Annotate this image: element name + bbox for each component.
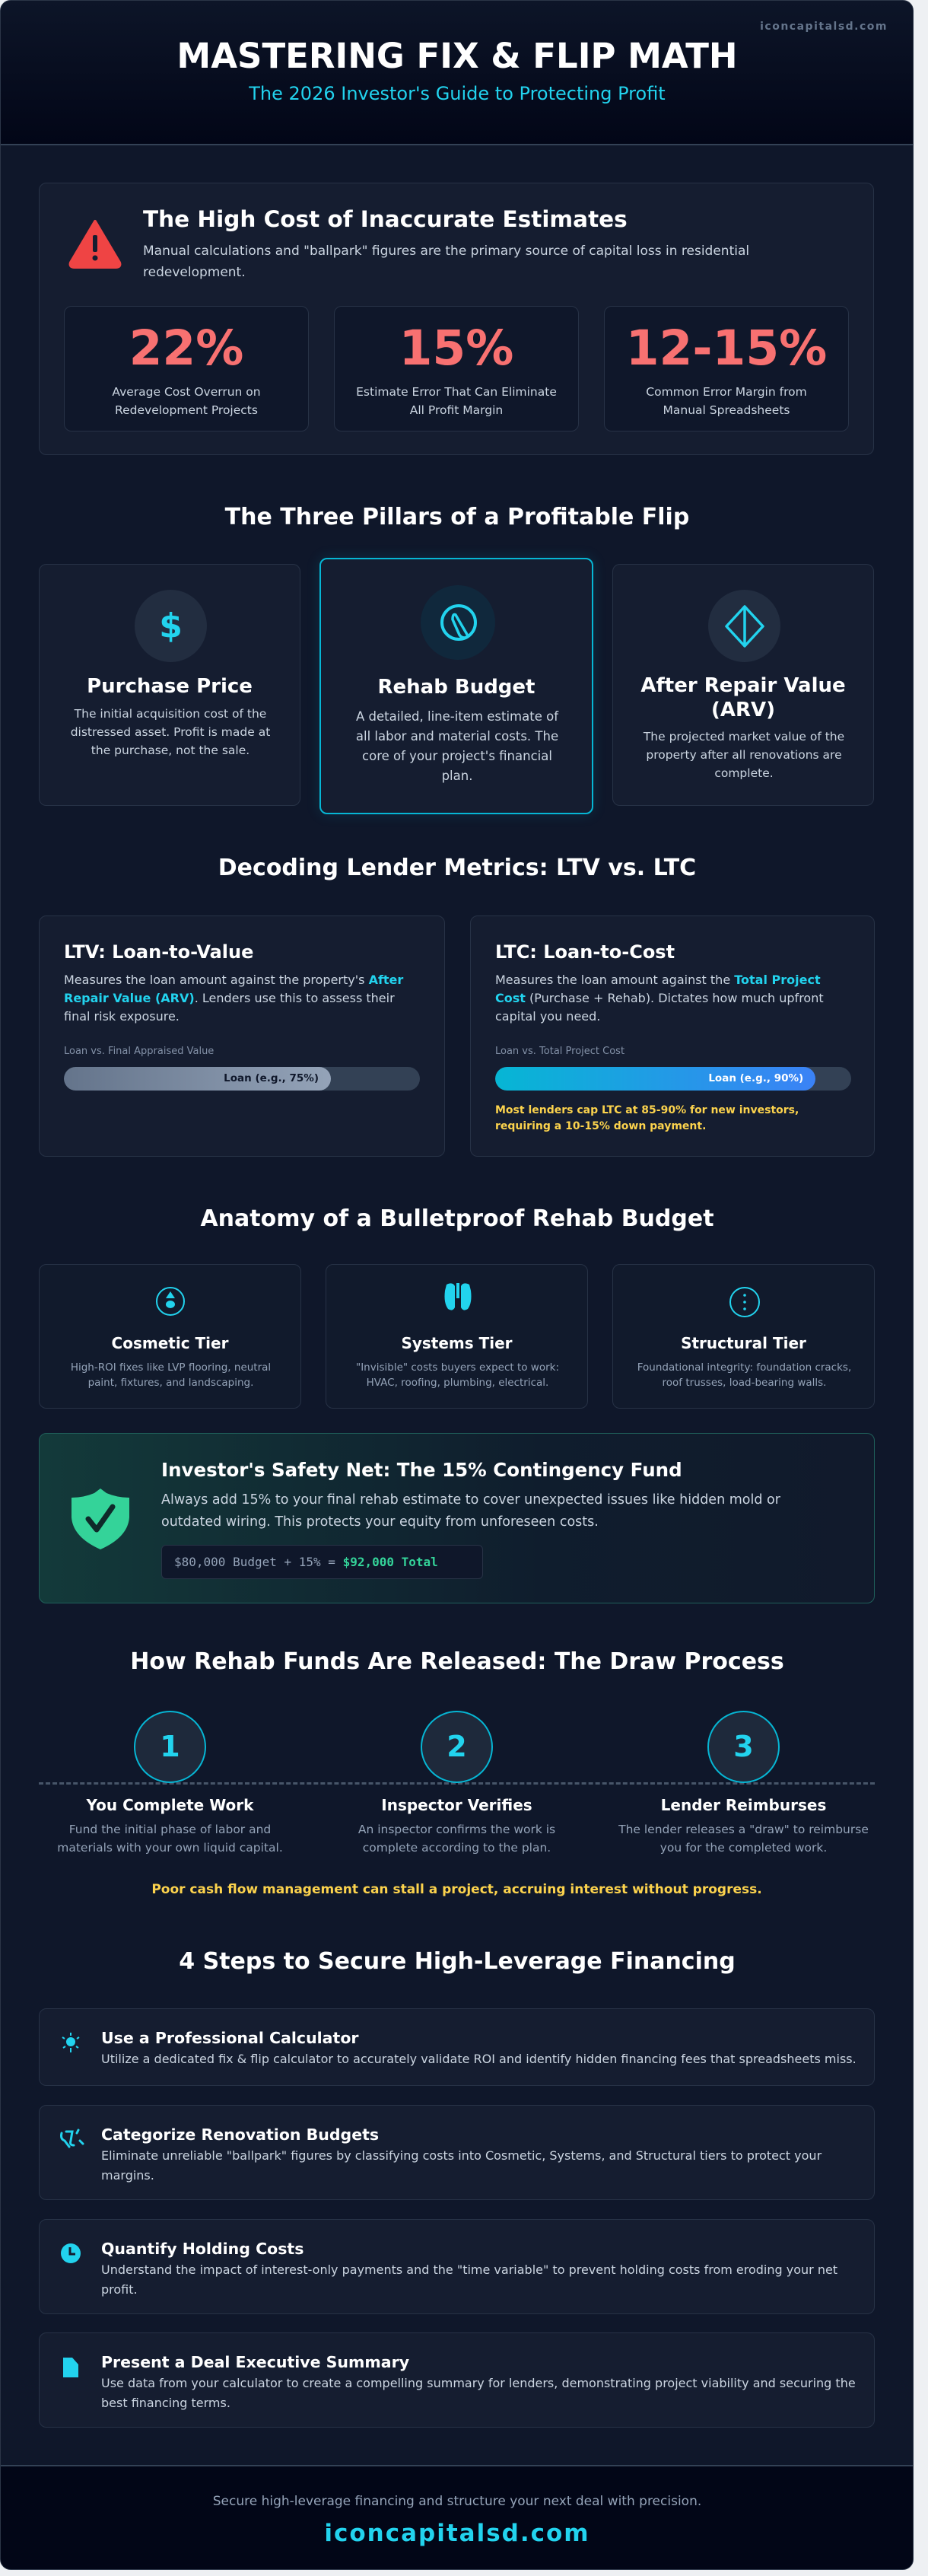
text: Measures the loan amount against the property's After Repair Value (ARV). Lenders use this to assess their final risk exposure. (64, 973, 403, 1024)
step card: calculator (39, 2008, 875, 2086)
panel: structural tier (612, 1264, 875, 1409)
dashed line (39, 1782, 875, 1785)
footer url: iconcapitalsd.com (324, 2520, 590, 2547)
icon: dollar (135, 590, 207, 662)
title: (ARV) (711, 699, 775, 721)
text: "Invisible" costs buyers expect to work: HVAC, roofing, plumbing, electrical. (356, 1361, 559, 1389)
formula box (161, 1545, 483, 1579)
icon: dotted circle (729, 1287, 760, 1317)
text: Measures the loan amount against the Total Project Cost (Purchase + Rehab). Dictates how much upfront capital you need. (495, 973, 824, 1024)
heading: Investor's Safety Net: The 15% Contingency Fund (161, 1459, 682, 1481)
step 2: An inspector confirms the work is complete according to the plan. (358, 1823, 555, 1855)
footer tagline: Secure high-leverage financing and structure your next deal with precision. (213, 2494, 701, 2509)
title: LTV: Loan-to-Value (64, 941, 253, 963)
icon: tools (60, 2129, 84, 2148)
panel: high cost of inaccurate estimates (39, 183, 874, 455)
step 3: Lender Reimburses (661, 1796, 826, 1814)
step 3 (618, 1711, 869, 1855)
warning note: Poor cash flow management can stall a project, accruing interest without progress. (151, 1882, 762, 1897)
title: Cosmetic Tier (112, 1334, 228, 1352)
formula box: $80,000 Budget + 15% = $92,000 Total (174, 1555, 438, 1569)
text: Quantify Holding Costs (101, 2240, 304, 2258)
bar chart: LTC (495, 1046, 851, 1091)
step card: holding costs (39, 2219, 875, 2314)
bar chart: LTV: Loan vs. Final Appraised Value (64, 1046, 214, 1057)
step 1: Fund the initial phase of labor and materials with your own liquid capital. (57, 1823, 283, 1855)
text: Use a Professional Calculator (101, 2029, 359, 2047)
text: The projected market value of the property after all renovations are complete. (644, 730, 844, 780)
text: The initial acquisition cost of the distressed asset. Profit is made at the purchase, not the sale. (71, 707, 270, 757)
title: After Repair Value (640, 674, 846, 697)
icon: warning (68, 219, 122, 269)
panel: ARV (612, 564, 874, 806)
step 2 (358, 1711, 555, 1855)
step 2: 2 (447, 1730, 467, 1763)
stat: 12-15% (604, 306, 849, 431)
panel: safety net contingency (39, 1433, 875, 1603)
panel: LTC (470, 915, 875, 1157)
footer (1, 2465, 914, 2571)
panel: systems tier (326, 1264, 588, 1409)
icon: gear (62, 2033, 79, 2052)
stat: 15%: All Profit Margin (410, 403, 503, 417)
stat: 22% (64, 306, 309, 431)
icon: dollar: $ (159, 607, 183, 645)
icon: shield (72, 1489, 129, 1549)
bar chart: LTV (64, 1046, 420, 1091)
bar chart: LTV: Loan (e.g., 75%) (224, 1072, 319, 1084)
text: Categorize Renovation Budgets (101, 2125, 379, 2144)
step card: calculator: Utilize a dedicated fix & flip calculator to accurately validate ROI and identify hidden financing fees that spreadsheets miss. (101, 2052, 856, 2066)
icon: diamond (708, 590, 780, 662)
step 3: 3 (733, 1730, 754, 1763)
heading: 4 steps: 4 Steps to Secure High-Leverage Financing (179, 1948, 736, 1975)
step 1: 1 (160, 1730, 180, 1763)
title: Rehab Budget (377, 676, 535, 699)
stat: 22%: Redevelopment Projects (115, 403, 258, 417)
stat: 12-15%: Manual Spreadsheets (663, 403, 790, 417)
stat: 22%: Average Cost Overrun on (112, 385, 261, 399)
description: Manual calculations and "ballpark" figures are the primary source of capital loss in residential redevelopment. (143, 244, 749, 280)
heading: decoding lender metrics: Decoding Lender Metrics: LTV vs. LTC (218, 855, 696, 881)
text: High-ROI fixes like LVP flooring, neutral paint, fixtures, and landscaping. (71, 1361, 271, 1389)
step 1: You Complete Work (87, 1796, 253, 1814)
icon: lungs (444, 1283, 472, 1310)
title: Systems Tier (401, 1334, 513, 1352)
heading: anatomy of rehab budget: Anatomy of a Bulletproof Rehab Budget (200, 1205, 714, 1232)
text: Foundational integrity: foundation cracks, roof trusses, load-bearing walls. (637, 1361, 851, 1389)
heading: The High Cost of Inaccurate Estimates (143, 206, 628, 232)
callout: LTC cap note: Most lenders cap LTC at 85-90% for new investors, requiring a 10-15% down payment. (495, 1104, 799, 1132)
icon: paint (156, 1287, 185, 1316)
heading: three pillars: The Three Pillars of a Profitable Flip (225, 504, 689, 530)
panel: LTV (39, 915, 445, 1157)
title (640, 674, 846, 721)
stat: 15% (334, 306, 579, 431)
icon: wrench (421, 585, 495, 660)
subtitle: The 2026 Investor's Guide to Protecting Profit (249, 83, 666, 104)
stat: 15%: 15% (399, 320, 513, 376)
brand tag: iconcapitalsd.com (760, 21, 888, 33)
panel: rehab budget (highlighted) (319, 558, 593, 814)
step 1 (57, 1711, 283, 1855)
panel: cosmetic tier (39, 1264, 301, 1409)
step card: categorize: Eliminate unreliable "ballpark" figures by classifying costs into Cosmetic, Systems, and Structural tiers to protect your margins. (101, 2148, 822, 2183)
stat: 12-15%: Common Error Margin from (646, 385, 807, 399)
bar chart: LTC: Loan vs. Total Project Cost (495, 1046, 624, 1057)
title: Purchase Price (87, 675, 253, 698)
text: A detailed, line-item estimate of all labor and material costs. The core of your project's financial plan. (356, 709, 558, 783)
step card: executive summary: Use data from your calculator to create a compelling summary for lenders, demonstrating project viability and securing the best financing terms. (101, 2376, 856, 2410)
text: Present a Deal Executive Summary (101, 2353, 409, 2371)
bar chart: LTC: Loan (e.g., 90%) (708, 1072, 803, 1084)
step 3: The lender releases a "draw" to reimburse you for the completed work. (618, 1823, 869, 1855)
stat: 12-15%: 12-15% (626, 320, 827, 376)
step card: categorize (39, 2105, 875, 2200)
header (1, 1, 914, 145)
text: Always add 15% to your final rehab estimate to cover unexpected issues like hidden mold or outdated wiring. This protects your equity from unforeseen costs. (161, 1492, 780, 1530)
heading: draw process: How Rehab Funds Are Released: The Draw Process (130, 1648, 784, 1675)
panel: purchase price (39, 564, 300, 806)
step card: holding costs: Understand the impact of interest-only payments and the "time variable" to prevent holding costs from eroding your net profit. (101, 2262, 837, 2297)
stat: 15%: Estimate Error That Can Eliminate (356, 385, 557, 399)
icon: document (63, 2358, 78, 2377)
title: MASTERING FIX & FLIP MATH (176, 36, 738, 76)
icon: clock (61, 2243, 81, 2263)
timeline: draw process (39, 1711, 875, 1897)
step card: executive summary (39, 2332, 875, 2428)
stat: 22%: 22% (129, 320, 243, 376)
title: LTC: Loan-to-Cost (495, 941, 675, 963)
title: Structural Tier (681, 1334, 806, 1352)
step 2: Inspector Verifies (381, 1796, 532, 1814)
